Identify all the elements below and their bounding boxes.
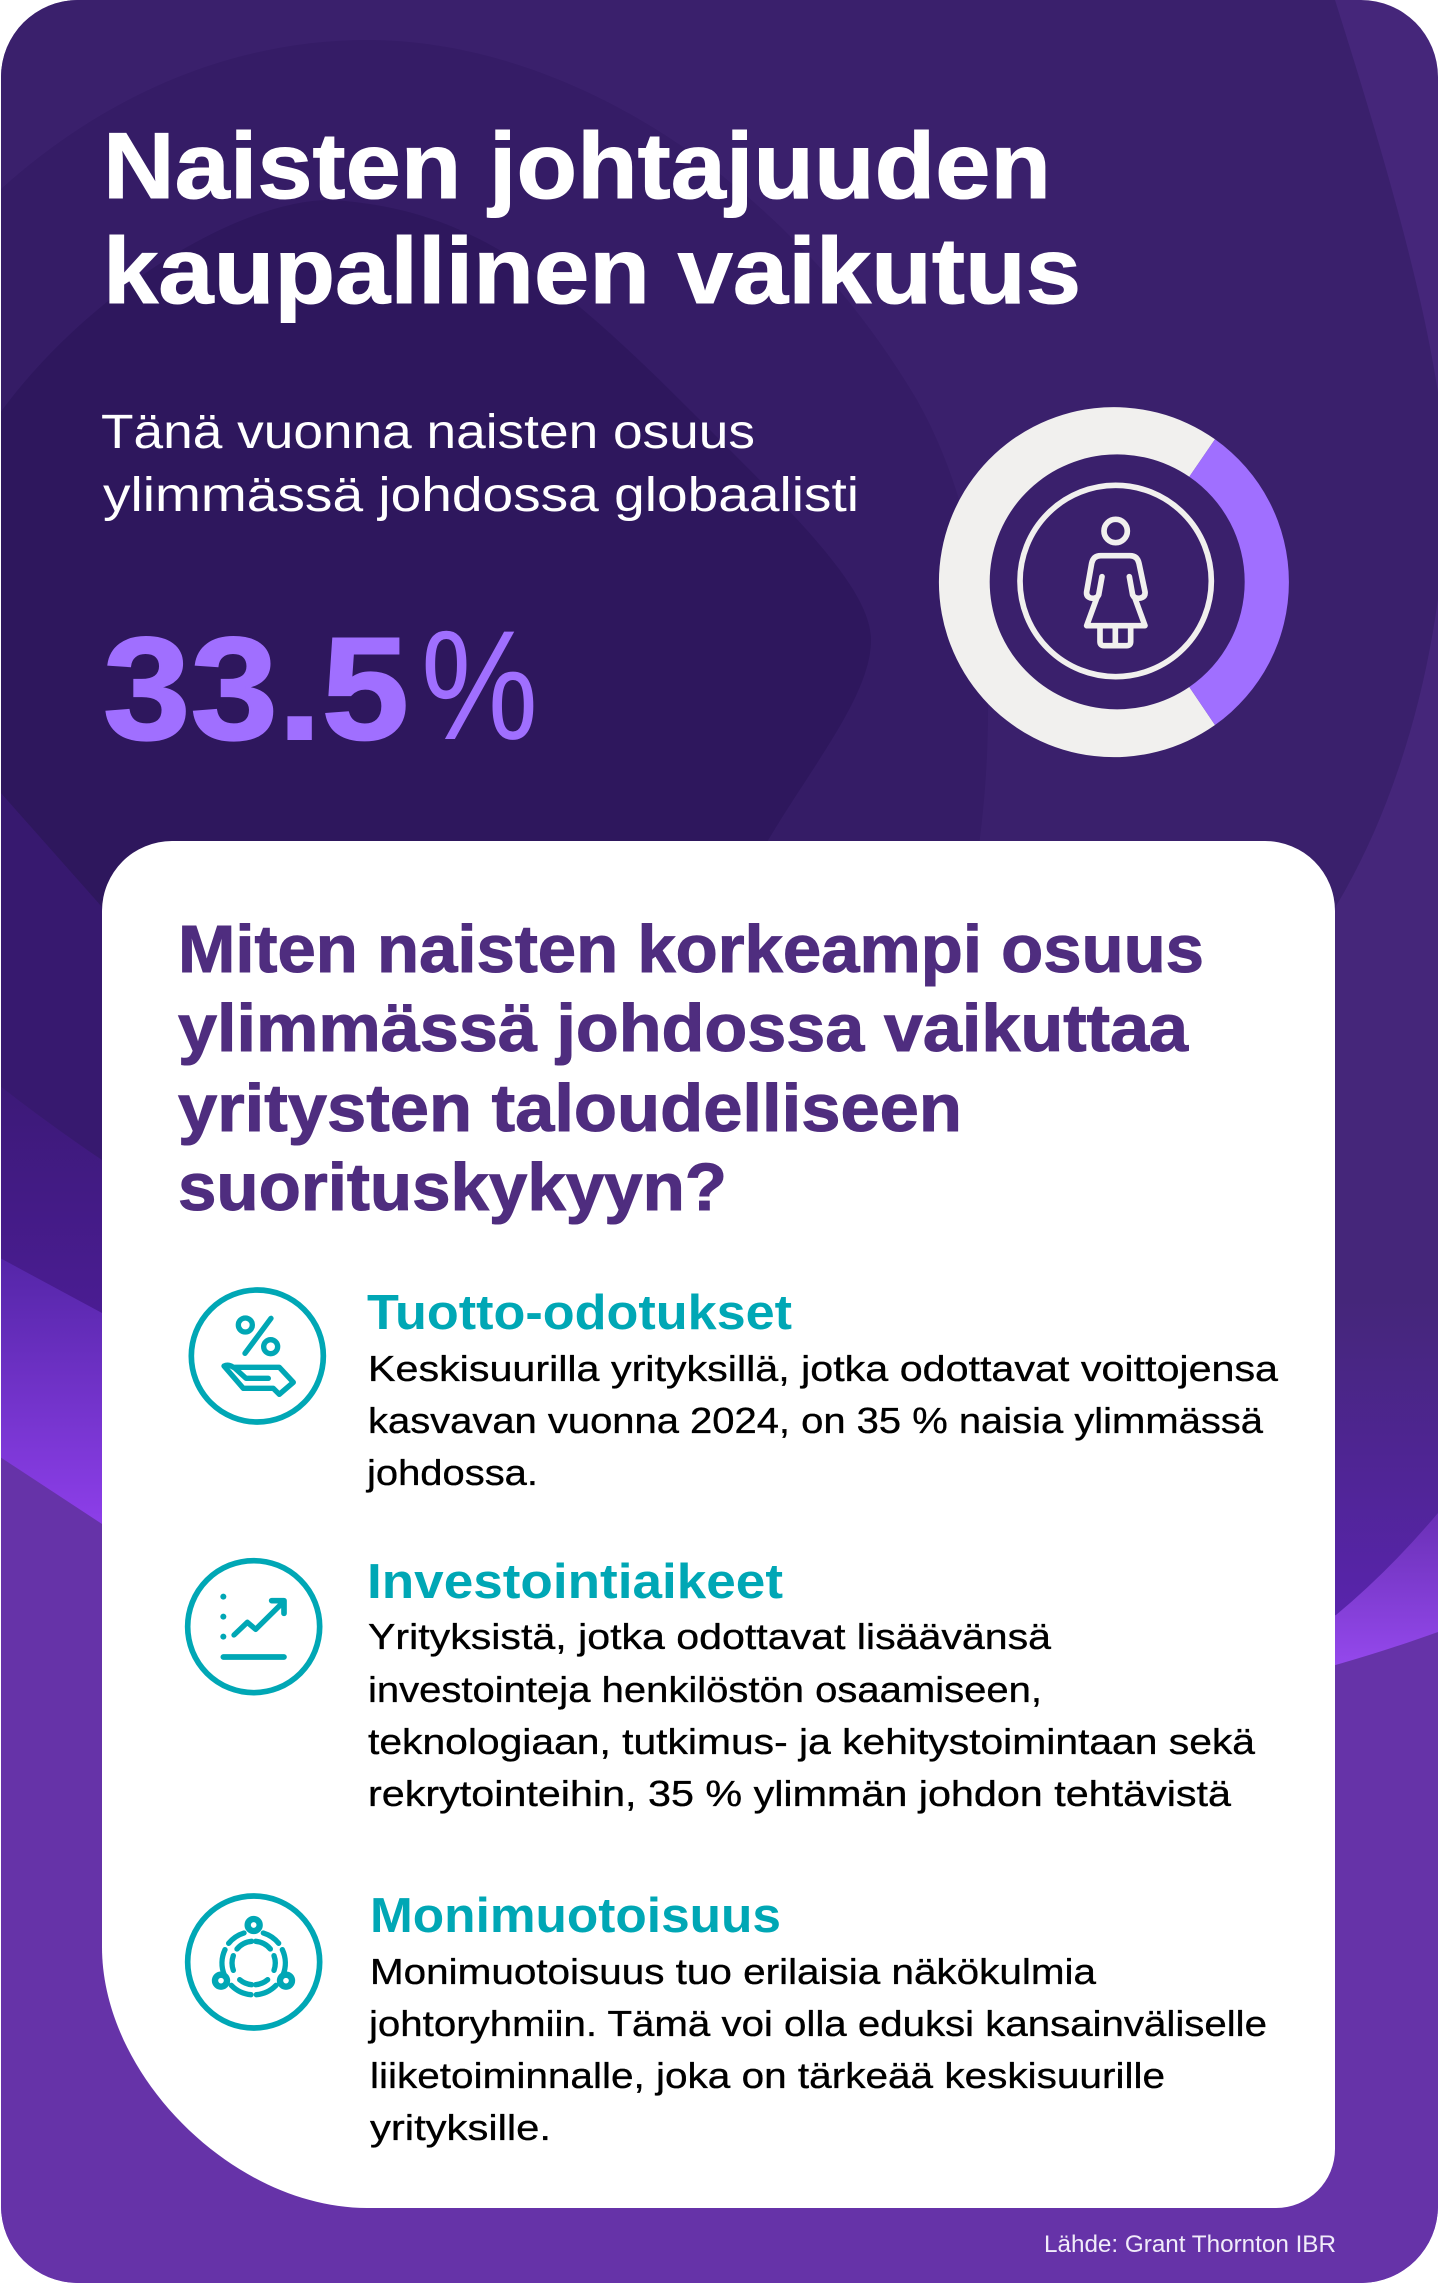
icon: growth chart (188, 1561, 320, 1693)
section text: Monimuotoisuus tuo erilaisia näkökulmia (370, 1951, 1097, 1992)
title: kaupallinen vaikutus (103, 218, 1081, 323)
section text (368, 1616, 1256, 1814)
panel heading: ylimmässä johdossa vaikuttaa (178, 991, 1189, 1066)
section text: yrityksille. (370, 2107, 551, 2148)
title: Naisten johtajuuden (103, 113, 1051, 218)
subtitle: ylimmässä johdossa globaalisti (103, 469, 859, 522)
section text: liiketoiminnalle, joka on tärkeää keskisuurille (370, 2055, 1165, 2096)
section text: teknologiaan, tutkimus- ja kehitystoimintaan sekä (368, 1721, 1256, 1762)
section: Tuotto-odotukset (366, 1286, 1279, 1493)
source note: Lähde: Grant Thornton IBR (1044, 2231, 1336, 2258)
icon: woman in circle (1020, 485, 1211, 677)
section text (368, 1951, 1267, 2148)
section text: johtoryhmiin. Tämä voi olla eduksi kansainväliselle (368, 2003, 1267, 2044)
section text: Yrityksistä, jotka odottavat lisäävänsä (368, 1616, 1052, 1657)
section text: kasvavan vuonna 2024, on 35 % naisia ylimmässä (368, 1400, 1264, 1441)
section text: johdossa. (366, 1452, 538, 1493)
title (103, 113, 1081, 323)
panel heading (178, 912, 1204, 1225)
subtitle: Tänä vuonna naisten osuus (101, 406, 755, 459)
section text (366, 1348, 1279, 1493)
panel heading: suorituskykyyn? (178, 1150, 727, 1225)
section text: rekrytointeihin, 35 % ylimmän johdon tehtävistä (368, 1773, 1232, 1814)
white content panel (102, 841, 1335, 2208)
icon: percent over hand (191, 1290, 323, 1422)
subtitle (101, 406, 859, 522)
big stat: 33.5% (103, 599, 538, 773)
donut chart with woman icon (939, 407, 1289, 757)
big stat: 33.5%: % (421, 599, 538, 773)
section: Investointiaikeet (367, 1555, 1256, 1814)
section heading: Tuotto-odotukset (367, 1286, 792, 1340)
icon: people in a circle (188, 1896, 320, 2028)
section: Monimuotoisuus (368, 1889, 1267, 2148)
section heading: Investointiaikeet (367, 1555, 783, 1609)
big stat: 33.5%: 33.5 (103, 607, 409, 770)
section text: Keskisuurilla yrityksillä, jotka odottavat voittojensa (368, 1348, 1279, 1389)
panel heading: Miten naisten korkeampi osuus (178, 912, 1204, 987)
section heading: Monimuotoisuus (370, 1889, 781, 1943)
donut highlighted segment (1189, 439, 1289, 725)
panel heading: yritysten taloudelliseen (178, 1071, 962, 1146)
section text: investointeja henkilöstön osaamiseen, (368, 1669, 1042, 1710)
